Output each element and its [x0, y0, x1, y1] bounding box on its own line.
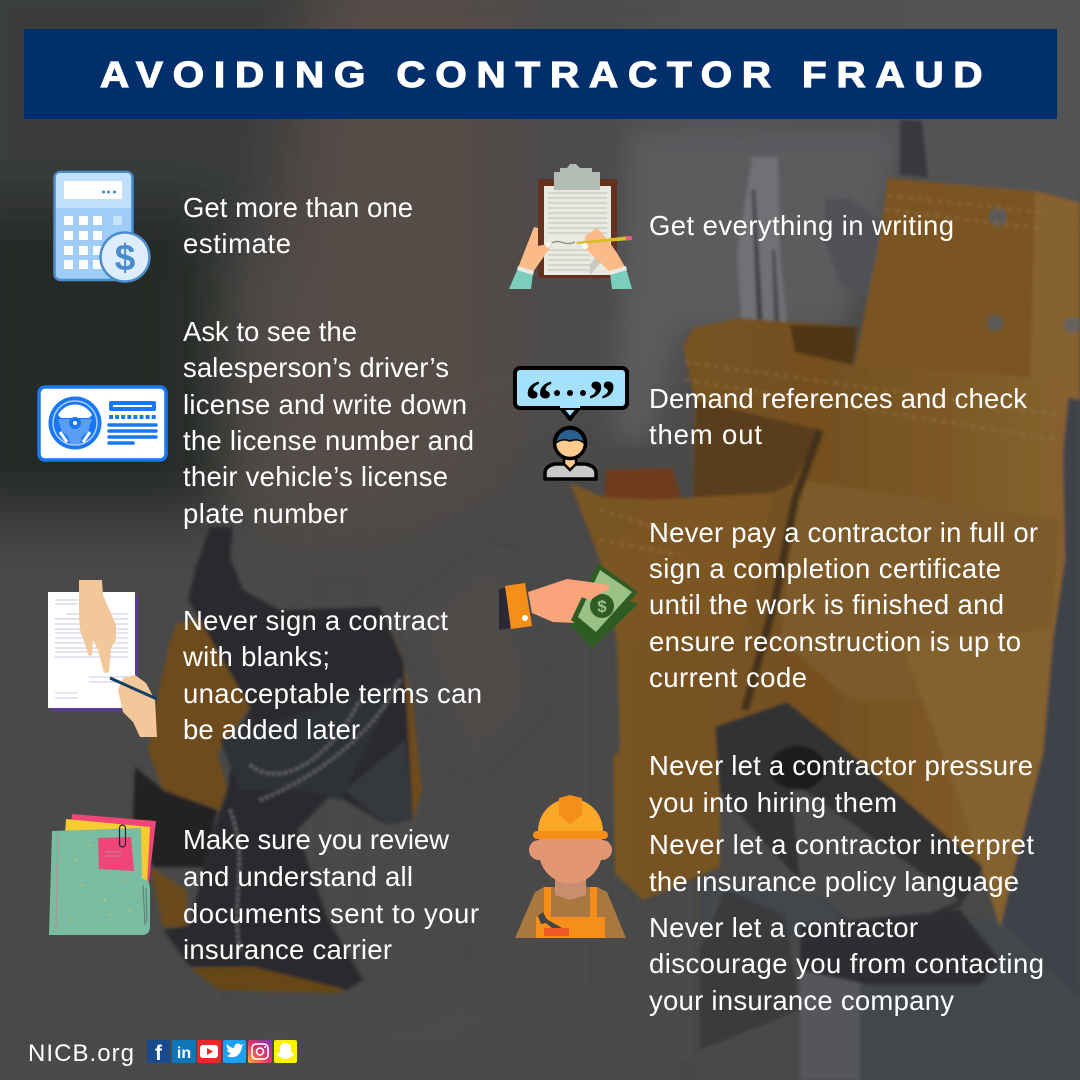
icon: twitter	[223, 1040, 246, 1063]
hammer	[715, 702, 983, 943]
text: never pay in full: until the work is finished and	[649, 589, 1004, 620]
icon: hands signing on clipboard	[509, 164, 632, 289]
text: never sign a contract with blanks: unacceptable terms can	[183, 678, 482, 709]
text: get more than one estimate: estimate	[183, 228, 291, 259]
icon: driver's license card	[39, 387, 166, 460]
icon: linkedin	[172, 1040, 196, 1063]
left column text	[182, 192, 482, 965]
text: driver's license advice: Ask to see the	[183, 316, 357, 347]
text: never let a contractor interpret policy	[649, 829, 1034, 897]
icon: hand holding cash	[499, 563, 638, 649]
main pouch	[570, 318, 1070, 927]
text: get everything in writing: Get everything in writing	[649, 210, 954, 241]
icon: construction worker	[515, 795, 626, 938]
text: review all documents: documents sent to your	[183, 898, 479, 929]
text: driver's license advice: salesperson’s driver’s	[183, 352, 449, 383]
footer: social media icons	[147, 1040, 297, 1065]
text: review all documents: and understand all	[183, 861, 413, 892]
text: never sign a contract with blanks: with blanks;	[182, 641, 330, 672]
text: review all documents: insurance carrier	[183, 934, 392, 965]
icon: linkedin: in	[177, 1045, 191, 1062]
icon: calculator with dollar coin: $	[115, 237, 136, 278]
title banner	[24, 29, 1057, 119]
text: demand references: Demand references and check	[649, 383, 1027, 414]
icon: calculator with dollar coin	[54, 172, 150, 282]
icon: snapchat	[274, 1040, 297, 1063]
icon: facebook: f	[155, 1042, 163, 1065]
back pocket	[853, 178, 1080, 395]
text: never let a contractor pressure you: you into hiring them	[649, 787, 897, 818]
text: never pay in full	[649, 517, 1038, 693]
text: never pay in full: sign a completion certificate	[649, 553, 1001, 584]
icon: hand holding cash: $	[597, 597, 607, 616]
icon: hand signing a contract	[48, 580, 157, 737]
text: get more than one estimate: Get more than one	[183, 192, 413, 223]
footer: website: NICB.org	[28, 1040, 134, 1067]
tool with red grip	[604, 448, 682, 500]
text: never sign a contract with blanks: Never sign a contract	[183, 605, 448, 636]
text: never let a contractor pressure you: Never let a contractor pressure	[649, 750, 1033, 781]
glove dark	[133, 767, 217, 867]
text: demand references: them out	[649, 419, 762, 450]
text: driver's license advice: license and write down	[183, 389, 467, 420]
rivets and stitches	[989, 208, 1007, 226]
text: never let a contractor discourage you: discourage you from contacting	[649, 948, 1044, 979]
title banner: AVOIDING CONTRACTOR FRAUD	[100, 55, 983, 95]
text: review all documents	[183, 824, 479, 965]
icon: stack of folders and sticky note	[49, 814, 156, 935]
text: demand references	[649, 383, 1027, 450]
text: review all documents: Make sure you review	[183, 824, 449, 855]
text: never let a contractor discourage you: your insurance company	[649, 985, 954, 1016]
text: never pay in full: Never pay a contractor in full or	[649, 517, 1038, 548]
text: driver's license advice: the license number and	[183, 425, 474, 456]
glove tan	[148, 613, 250, 810]
trousers	[905, 0, 1080, 205]
text: never pay in full: current code	[649, 662, 807, 693]
icon: facebook	[147, 1040, 170, 1065]
text: never let a contractor interpret policy: the insurance policy language	[649, 866, 1019, 897]
icon: person with speech bubble quote: ”	[588, 370, 616, 432]
text: never pay in full: ensure reconstruction is up to	[649, 626, 1021, 657]
icon: instagram	[248, 1040, 272, 1063]
text: get more than one estimate	[183, 192, 413, 259]
icon: person with speech bubble quote: “	[525, 370, 553, 432]
right column text	[649, 210, 1044, 1016]
text: never let a contractor interpret policy: Never let a contractor interpret	[649, 829, 1034, 860]
pliers	[737, 157, 790, 350]
text: never sign a contract with blanks	[182, 605, 482, 745]
icon: person with speech bubble quote	[515, 368, 627, 479]
text: never sign a contract with blanks: be added later	[183, 714, 360, 745]
text: never let a contractor discourage you: Never let a contractor	[649, 912, 918, 943]
text: never let a contractor pressure you	[649, 750, 1033, 818]
text: never let a contractor discourage you	[649, 912, 1044, 1016]
text: driver's license advice	[183, 316, 474, 529]
text: driver's license advice: plate number	[183, 498, 348, 529]
text: driver's license advice: their vehicle’s license	[183, 461, 448, 492]
icon: youtube	[197, 1040, 221, 1063]
wrench	[825, 198, 885, 300]
